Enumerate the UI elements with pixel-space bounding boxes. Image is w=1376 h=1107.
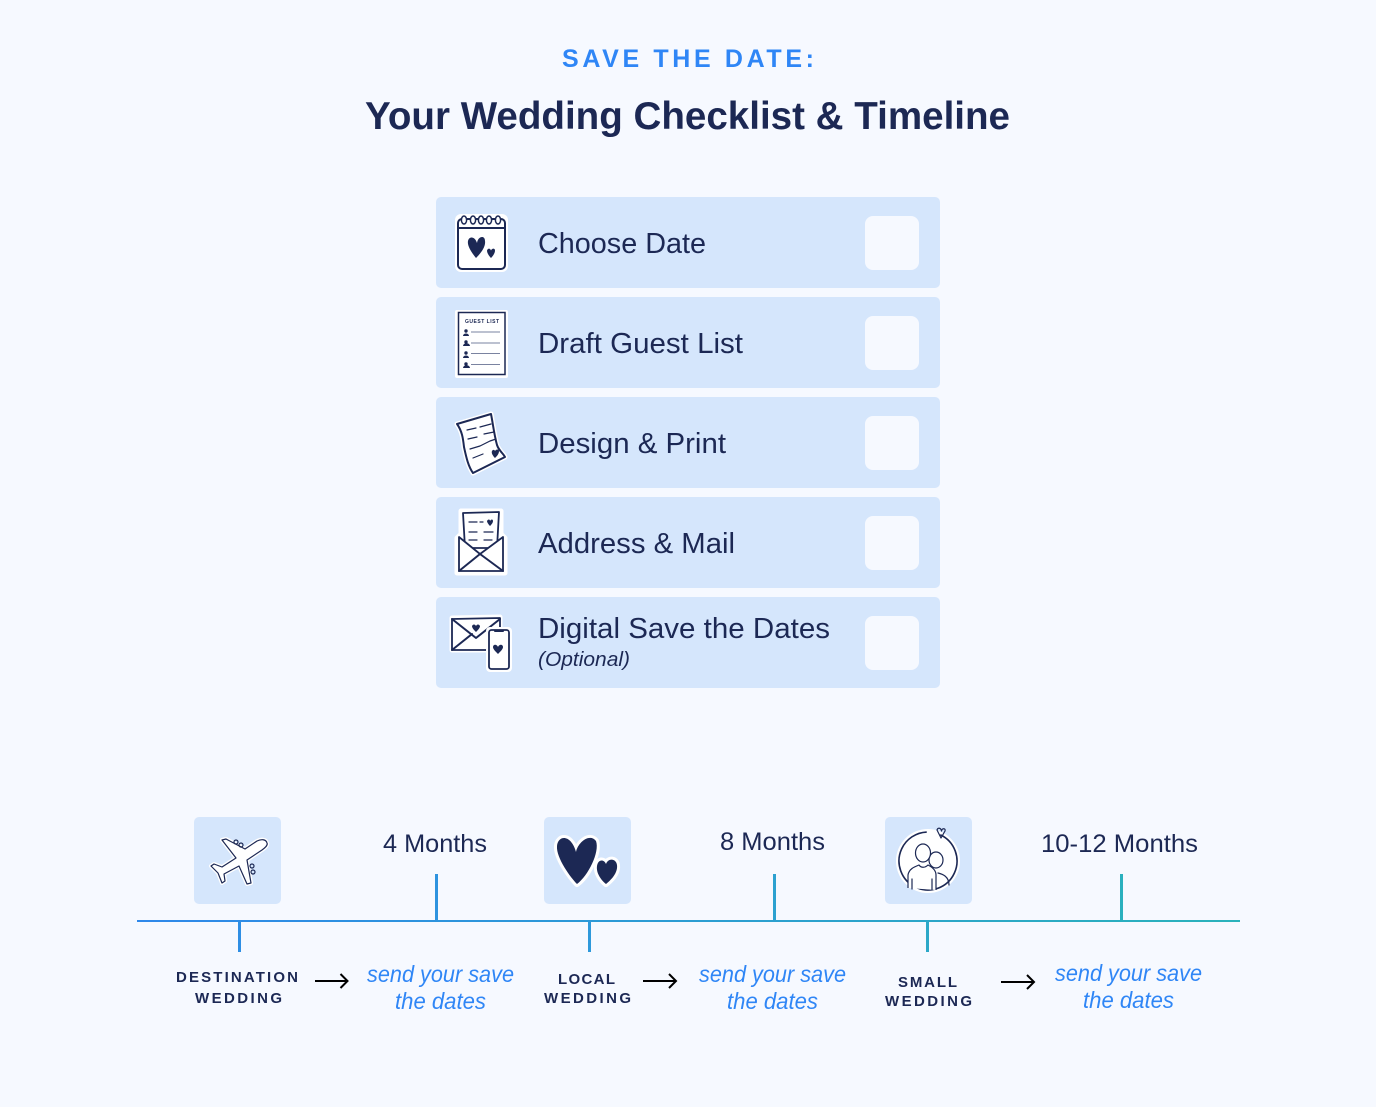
checklist label: Digital Save the Dates bbox=[538, 613, 830, 645]
caption: local wedding: WEDDING bbox=[544, 990, 631, 1007]
note: send your save the dates: send your save bbox=[367, 961, 514, 987]
checklist label: Draft Guest List bbox=[538, 328, 743, 360]
arrow bbox=[643, 974, 676, 988]
note: send your save the dates: the dates bbox=[727, 988, 818, 1014]
checklist label: Address & Mail bbox=[538, 528, 735, 560]
checklist row: digital save the dates bbox=[436, 597, 940, 688]
arrow bbox=[315, 974, 348, 988]
title: Your Wedding Checklist & Timeline bbox=[365, 95, 1010, 138]
checkbox bbox=[865, 216, 919, 270]
caption: local wedding: LOCAL bbox=[558, 971, 615, 988]
icon: printed invitation bbox=[457, 414, 505, 473]
checklist label: Choose Date bbox=[538, 228, 706, 260]
label: 10-12 months: 10-12 Months bbox=[1041, 830, 1198, 858]
caption: destination wedding: DESTINATION bbox=[176, 969, 298, 986]
checklist label: Design & Print bbox=[538, 428, 726, 460]
eyebrow heading: SAVE THE DATE: bbox=[562, 45, 814, 73]
caption: destination wedding: WEDDING bbox=[195, 990, 282, 1007]
icon: couple tile bbox=[885, 817, 972, 904]
checkbox bbox=[865, 516, 919, 570]
optional note: (Optional) bbox=[538, 649, 630, 671]
checklist row: address and mail bbox=[436, 497, 940, 588]
note: send your save the dates: the dates bbox=[395, 988, 486, 1014]
checklist row: draft guest list bbox=[436, 297, 940, 388]
icon: guest list bbox=[455, 310, 508, 378]
checkbox bbox=[865, 316, 919, 370]
caption: small wedding: SMALL bbox=[898, 974, 957, 991]
note: send your save the dates: the dates bbox=[1083, 987, 1174, 1013]
icon: airplane tile bbox=[194, 817, 281, 904]
arrow bbox=[1001, 975, 1034, 989]
note: send your save the dates: send your save bbox=[1055, 960, 1202, 986]
icon: guest list: GUEST LIST bbox=[465, 319, 499, 325]
caption: small wedding: WEDDING bbox=[885, 993, 972, 1010]
icon: envelope and phone bbox=[452, 617, 512, 672]
label: 4 months: 4 Months bbox=[383, 830, 487, 858]
icon: open envelope with letter bbox=[457, 511, 505, 573]
timeline bbox=[137, 817, 1240, 1014]
icon: hearts tile bbox=[544, 817, 631, 904]
checkbox bbox=[865, 416, 919, 470]
timeline axis bbox=[137, 874, 1240, 952]
checklist row: design and print bbox=[436, 397, 940, 488]
checkbox bbox=[865, 616, 919, 670]
label: 8 months: 8 Months bbox=[720, 828, 825, 856]
icon: calendar with hearts bbox=[455, 214, 508, 272]
note: send your save the dates: send your save bbox=[699, 961, 846, 987]
checklist row: choose date bbox=[436, 197, 940, 288]
panel: checklist bbox=[436, 197, 940, 688]
